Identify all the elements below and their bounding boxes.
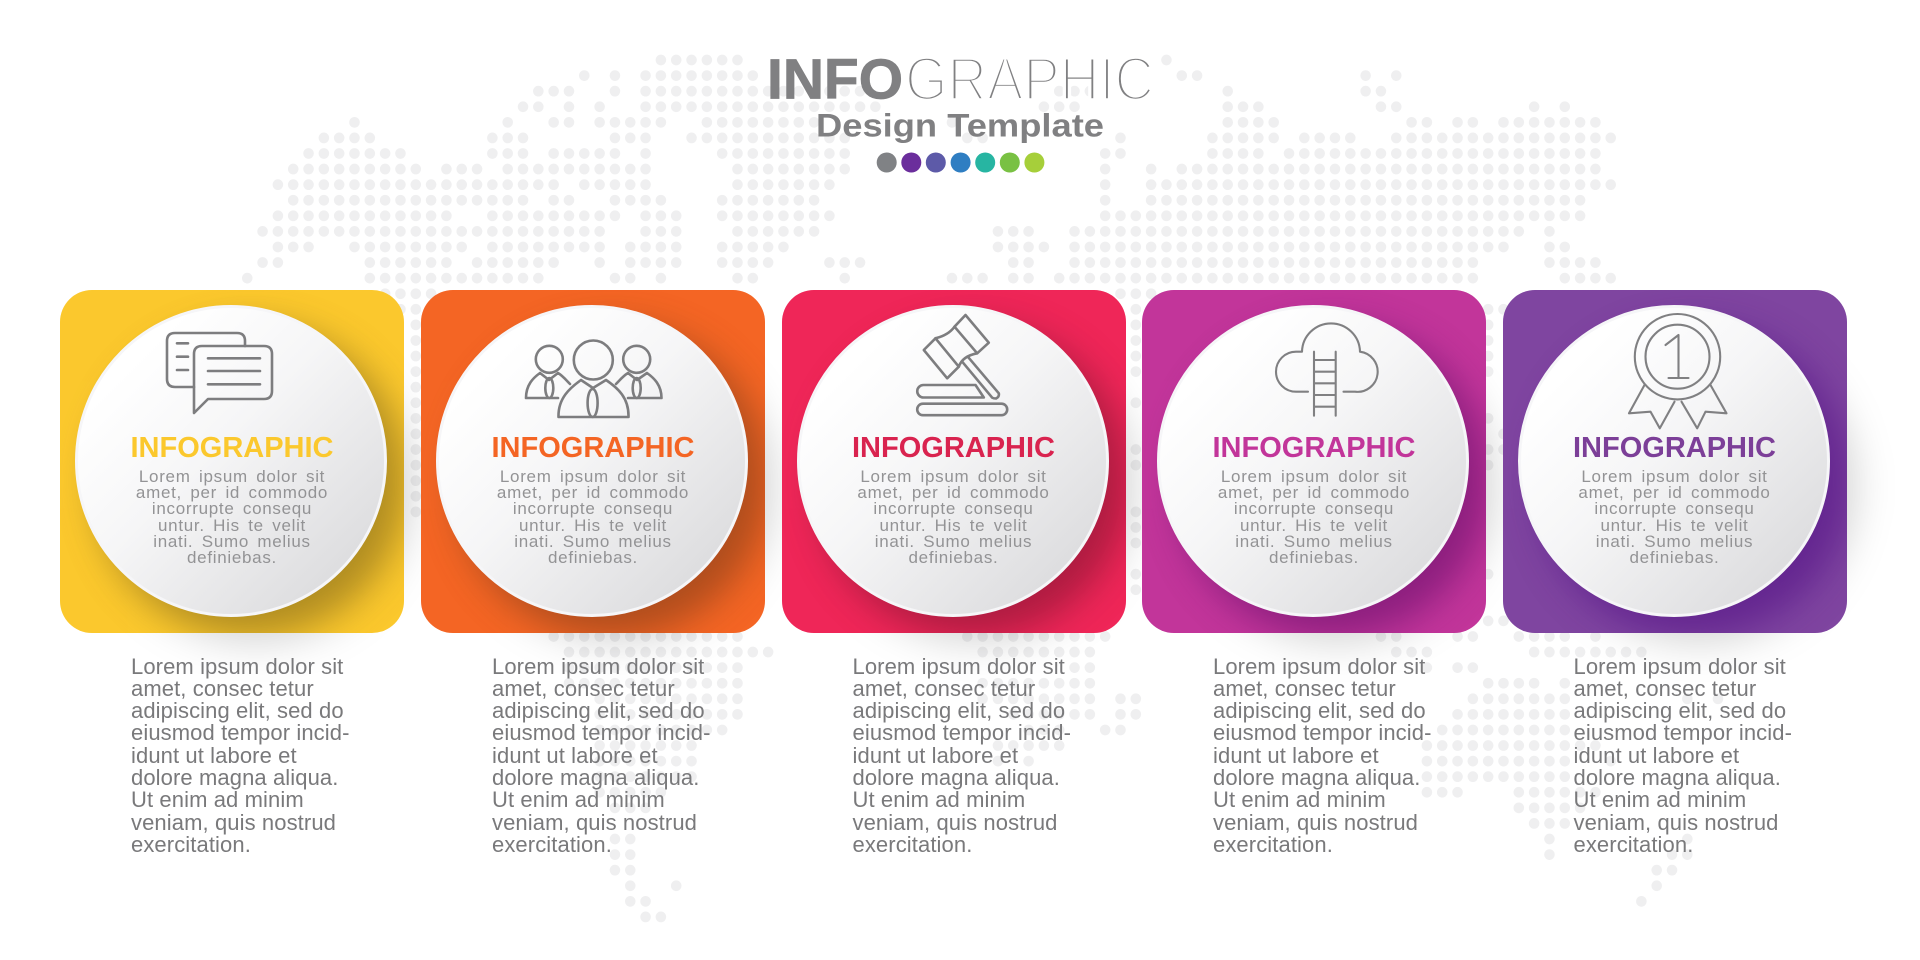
description: idunt ut labore et bbox=[1574, 743, 1739, 768]
heading: INFOGRAPHIC bbox=[852, 432, 1055, 464]
icon: gavel bbox=[916, 314, 1008, 416]
circle text: amet, per id commodo bbox=[1578, 483, 1771, 502]
description: amet, consec tetur bbox=[1213, 676, 1396, 701]
circle text: definiebas. bbox=[548, 548, 638, 567]
icon: cloud and ladder bbox=[1274, 322, 1379, 417]
heading: INFOGRAPHIC bbox=[1573, 432, 1776, 464]
circle text bbox=[1218, 467, 1410, 567]
circle text: amet, per id commodo bbox=[1218, 483, 1410, 502]
circle text: Lorem ipsum dolor sit bbox=[1581, 467, 1768, 486]
panel: step 5 purple bbox=[1503, 290, 1870, 857]
circle text: inati. Sumo melius bbox=[1235, 532, 1393, 551]
description: adipiscing elit, sed do bbox=[492, 698, 705, 723]
description: Ut enim ad minim bbox=[492, 787, 665, 812]
description: eiusmod tempor incid- bbox=[1213, 720, 1432, 745]
description: idunt ut labore et bbox=[131, 743, 297, 768]
colour dots under title bbox=[876, 152, 1044, 172]
description: idunt ut labore et bbox=[852, 743, 1018, 768]
description: Lorem ipsum dolor sit bbox=[131, 654, 343, 678]
description: exercitation. bbox=[852, 832, 972, 857]
panel: step 4 magenta bbox=[1142, 290, 1503, 857]
description bbox=[1213, 654, 1432, 857]
description: dolore magna aliqua. bbox=[852, 765, 1060, 790]
circle text: definiebas. bbox=[187, 548, 277, 567]
description: veniam, quis nostrud bbox=[492, 810, 697, 835]
description: amet, consec tetur bbox=[492, 676, 675, 701]
description: veniam, quis nostrud bbox=[131, 810, 336, 835]
description bbox=[492, 654, 711, 857]
circle text: amet, per id commodo bbox=[136, 483, 328, 502]
description: amet, consec tetur bbox=[1574, 676, 1756, 701]
description: Lorem ipsum dolor sit bbox=[492, 654, 704, 678]
circle text: untur. His te velit bbox=[1240, 516, 1388, 535]
description: adipiscing elit, sed do bbox=[131, 698, 344, 723]
description: Ut enim ad minim bbox=[1574, 787, 1746, 812]
circle text: amet, per id commodo bbox=[857, 483, 1050, 502]
description: adipiscing elit, sed do bbox=[852, 698, 1065, 723]
circle text: inati. Sumo melius bbox=[1596, 532, 1753, 551]
circle text: Lorem ipsum dolor sit bbox=[860, 467, 1047, 486]
heading: INFOGRAPHIC bbox=[1212, 432, 1416, 464]
description: adipiscing elit, sed do bbox=[1213, 698, 1426, 723]
heading: INFOGRAPHIC bbox=[492, 432, 694, 464]
description: dolore magna aliqua. bbox=[492, 765, 699, 790]
description: Ut enim ad minim bbox=[1213, 787, 1386, 812]
icon: chat bubbles bbox=[166, 332, 274, 414]
circle text: inati. Sumo melius bbox=[875, 532, 1032, 551]
circle text: definiebas. bbox=[1269, 548, 1359, 567]
title bbox=[767, 45, 1154, 144]
description: idunt ut labore et bbox=[492, 743, 658, 768]
description bbox=[1574, 654, 1792, 857]
circle text: incorrupte consequ bbox=[873, 499, 1034, 518]
description: veniam, quis nostrud bbox=[1213, 810, 1418, 835]
circle text: untur. His te velit bbox=[519, 516, 667, 535]
description: amet, consec tetur bbox=[852, 676, 1035, 701]
description: idunt ut labore et bbox=[1213, 743, 1379, 768]
circle text: untur. His te velit bbox=[158, 516, 306, 535]
description: Lorem ipsum dolor sit bbox=[1213, 654, 1425, 678]
description: exercitation. bbox=[492, 832, 612, 857]
description: veniam, quis nostrud bbox=[1574, 810, 1778, 835]
circle text: Lorem ipsum dolor sit bbox=[1221, 467, 1407, 486]
circle text bbox=[136, 467, 328, 567]
description: Lorem ipsum dolor sit bbox=[852, 654, 1065, 678]
description: eiusmod tempor incid- bbox=[131, 720, 350, 745]
circle text bbox=[857, 467, 1050, 567]
description: eiusmod tempor incid- bbox=[492, 720, 711, 745]
description: dolore magna aliqua. bbox=[1213, 765, 1420, 790]
circle text: amet, per id commodo bbox=[497, 483, 689, 502]
circle text: inati. Sumo melius bbox=[153, 532, 311, 551]
description: Ut enim ad minim bbox=[852, 787, 1025, 812]
description bbox=[852, 654, 1071, 857]
circle text: definiebas. bbox=[1630, 548, 1719, 567]
icon: medal with number one bbox=[1628, 313, 1728, 430]
panel: step 1 yellow bbox=[60, 290, 421, 857]
description: exercitation. bbox=[131, 832, 251, 857]
title: GRAPHIC bbox=[905, 45, 1154, 113]
circle text: Lorem ipsum dolor sit bbox=[500, 467, 686, 486]
heading: INFOGRAPHIC bbox=[130, 432, 334, 464]
description: veniam, quis nostrud bbox=[852, 810, 1058, 835]
description: Lorem ipsum dolor sit bbox=[1574, 654, 1786, 678]
panel: step 2 orange bbox=[421, 290, 782, 857]
circle text: incorrupte consequ bbox=[152, 499, 312, 518]
description: exercitation. bbox=[1574, 832, 1693, 857]
description: adipiscing elit, sed do bbox=[1574, 698, 1786, 723]
title: INFO bbox=[767, 48, 903, 112]
description: dolore magna aliqua. bbox=[131, 765, 338, 790]
description: dolore magna aliqua. bbox=[1574, 765, 1781, 790]
circle text: untur. His te velit bbox=[1601, 516, 1748, 535]
icon: team of people bbox=[524, 339, 663, 418]
circle text: incorrupte consequ bbox=[1594, 499, 1755, 518]
description: eiusmod tempor incid- bbox=[852, 720, 1071, 745]
panel: step 3 crimson bbox=[782, 290, 1142, 857]
description: Ut enim ad minim bbox=[131, 787, 304, 812]
circle text: untur. His te velit bbox=[880, 516, 1027, 535]
description: amet, consec tetur bbox=[131, 676, 314, 701]
circle text bbox=[1578, 467, 1771, 567]
circle text bbox=[497, 467, 689, 567]
circle text: definiebas. bbox=[909, 548, 998, 567]
description: exercitation. bbox=[1213, 832, 1333, 857]
title: Design Template bbox=[816, 108, 1104, 144]
circle text: incorrupte consequ bbox=[513, 499, 673, 518]
description bbox=[131, 654, 350, 857]
circle text: inati. Sumo melius bbox=[514, 532, 672, 551]
circle text: Lorem ipsum dolor sit bbox=[139, 467, 325, 486]
circle text: incorrupte consequ bbox=[1234, 499, 1394, 518]
description: eiusmod tempor incid- bbox=[1574, 720, 1792, 745]
